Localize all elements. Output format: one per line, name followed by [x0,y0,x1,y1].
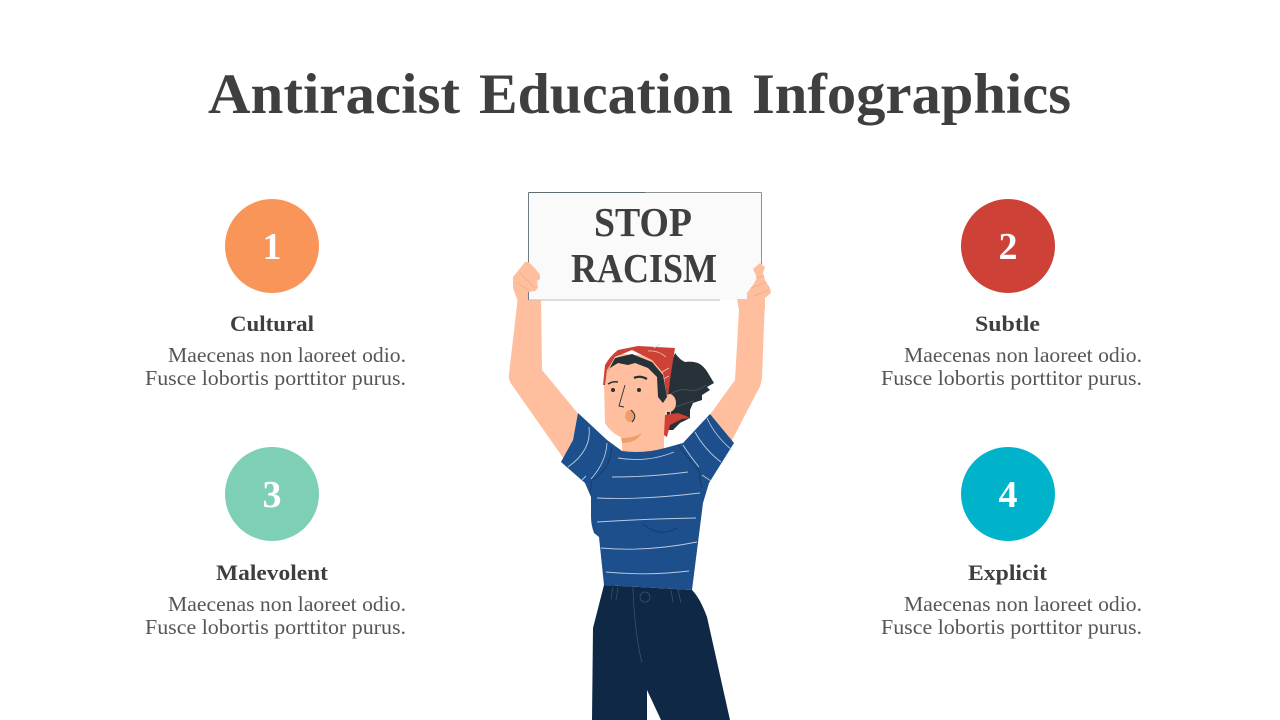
text block: cultural: Fusce lobortis porttitor purus. [145,366,406,390]
text block: malevolent [145,592,406,639]
sign text: STOP [594,199,692,245]
heading: explicit: Explicit [968,560,1048,585]
number badge 2: 2 [998,226,1018,268]
number badge 4 [961,447,1055,541]
right arm [706,299,765,448]
text block: malevolent: Fusce lobortis porttitor purus. [145,615,406,639]
text block: explicit [881,592,1142,639]
text block: malevolent: Maecenas non laoreet odio. [168,592,406,616]
title: Infographics [752,63,1071,126]
bandana [603,344,691,437]
number badge 2 [961,199,1055,293]
text block: subtle: Maecenas non laoreet odio. [904,343,1142,367]
text block: explicit: Fusce lobortis porttitor purus. [881,615,1142,639]
text block: subtle [881,343,1142,390]
title: Education [479,63,733,126]
text block: explicit: Maecenas non laoreet odio. [904,592,1142,616]
heading: cultural: Cultural [230,311,314,336]
number badge 3 [225,447,319,541]
sign text: RACISM [571,245,717,291]
heading: subtle: Subtle [975,311,1040,336]
text block: subtle: Fusce lobortis porttitor purus. [881,366,1142,390]
facial features [608,377,647,422]
panel: subtle [881,199,1142,390]
pants [592,585,730,720]
number badge 1: 1 [262,226,282,268]
illustration: protester holding sign [509,192,771,720]
left hand [513,262,540,302]
number badge 3: 3 [262,474,282,516]
striped shirt [561,413,734,590]
hair highlight [668,385,706,408]
text block: cultural: Maecenas non laoreet odio. [168,343,406,367]
hair front [607,354,667,403]
neck shadow [621,433,642,443]
panel: malevolent [145,447,406,639]
face [604,354,667,438]
number badge 4: 4 [998,474,1018,516]
text block: cultural [145,343,406,390]
sign board [528,192,762,300]
ear [662,394,676,412]
hair back [660,353,714,430]
number badge 1 [225,199,319,293]
heading: malevolent: Malevolent [216,560,329,585]
panel: cultural [145,199,406,390]
neck [622,425,664,455]
right hand [737,263,771,309]
sign text [571,199,717,291]
panel: explicit [881,447,1142,639]
title: Antiracist [208,63,460,126]
title [208,63,1071,126]
earring [666,410,670,416]
left arm [509,296,580,462]
